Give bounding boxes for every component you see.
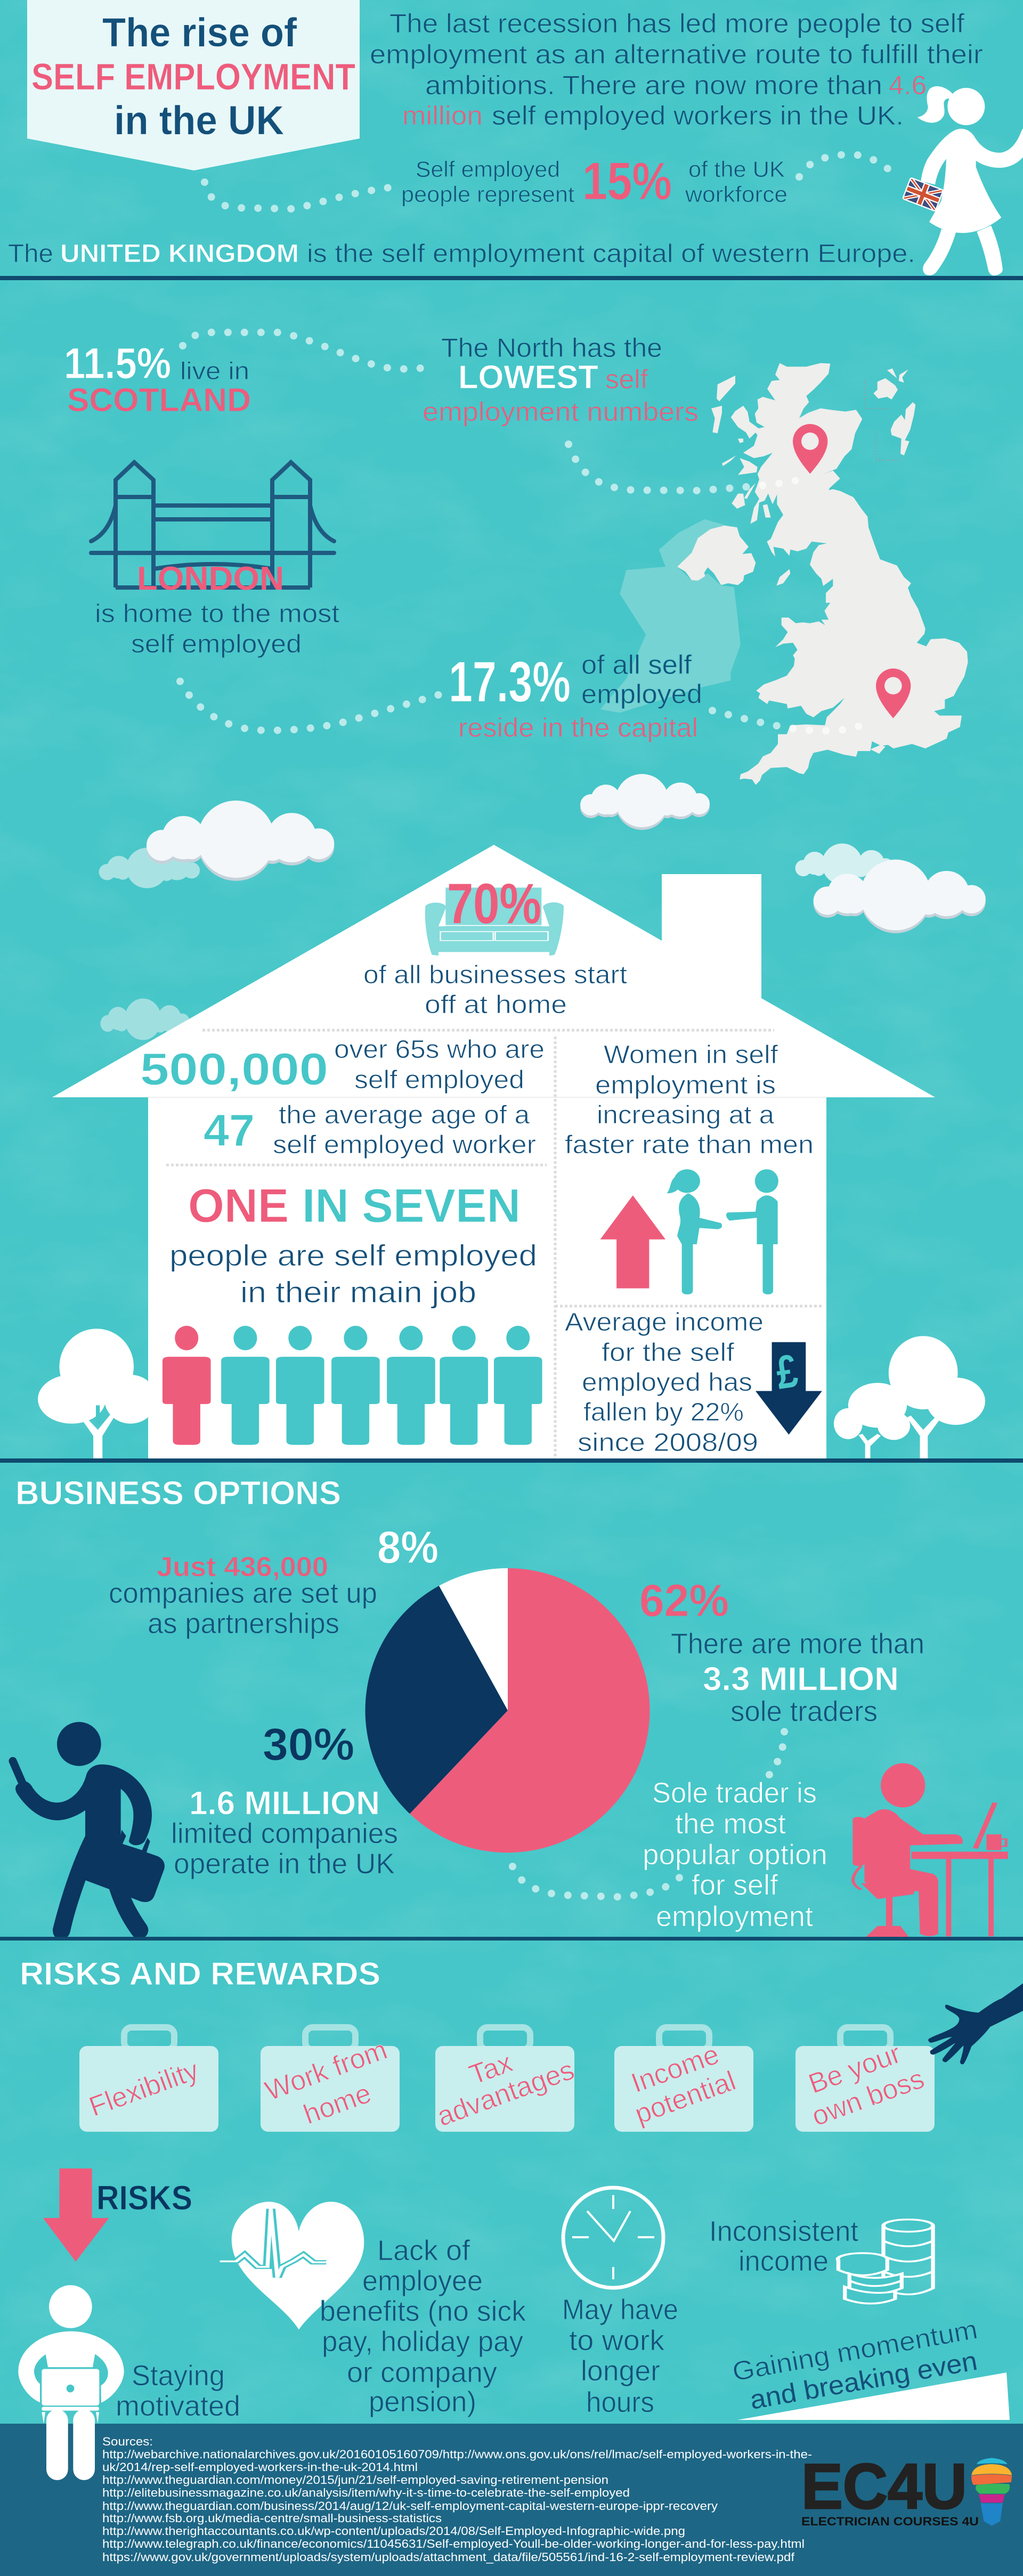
income stat bbox=[565, 1308, 764, 1457]
title banner: The rise of bbox=[102, 10, 297, 55]
sources list: http://www.telegraph.co.uk/finance/economics/11045631/Self-employed-Youll-be-older-working-longer-and-for-less-pay.html bbox=[102, 2537, 805, 2550]
reward bag: income potential bbox=[614, 2027, 753, 2132]
reward bag: work from home: Work from bbox=[261, 2034, 391, 2107]
reward bag: tax advantages: Tax bbox=[465, 2047, 516, 2091]
women stat: faster rate than men bbox=[565, 1131, 814, 1159]
sole traders stat: 62% bbox=[639, 1576, 729, 1626]
North stat bbox=[423, 333, 699, 427]
dotted trail left bbox=[205, 182, 389, 209]
sole traders stat: There are more than bbox=[671, 1628, 924, 1660]
map of UK bbox=[677, 363, 968, 785]
average age stat: 47 bbox=[204, 1105, 255, 1155]
reward bag: work from home: home bbox=[299, 2078, 375, 2131]
income stat: employed has bbox=[582, 1368, 752, 1397]
sole trader popular text: Sole trader is bbox=[652, 1777, 817, 1809]
women stat: increasing at a bbox=[597, 1101, 774, 1129]
income stat: Average income bbox=[565, 1308, 764, 1336]
icon: logo bulb bbox=[971, 2458, 1012, 2526]
London stat: self employed bbox=[131, 630, 302, 658]
70 percent stat: off at home bbox=[425, 991, 567, 1019]
limited companies stat: operate in the UK bbox=[174, 1848, 395, 1880]
icon: person with laptop bbox=[18, 2285, 124, 2480]
Scotland stat bbox=[64, 339, 251, 419]
longer hours text bbox=[562, 2294, 678, 2418]
icon: seven people bbox=[163, 1326, 542, 1445]
icon: risks down arrow bbox=[43, 2169, 109, 2262]
one in seven stat: in their main job bbox=[240, 1275, 476, 1309]
sources list bbox=[102, 2435, 812, 2564]
woman with union flag bbox=[902, 86, 1023, 275]
icon: down arrow with pound bbox=[756, 1342, 822, 1434]
cloud centre bbox=[580, 774, 710, 827]
benefits text: employee bbox=[362, 2265, 483, 2297]
reward bag: income potential: potential bbox=[631, 2065, 740, 2130]
partnerships stat bbox=[109, 1522, 439, 1640]
intro paragraph: employment as an alternative route to fulfill their bbox=[370, 39, 983, 69]
cloud pale left bbox=[99, 848, 200, 888]
dotted trail right bbox=[799, 154, 897, 178]
cloud pale right bbox=[795, 844, 894, 885]
title banner bbox=[27, 0, 360, 170]
average age stat: self employed worker bbox=[273, 1131, 536, 1159]
limited companies stat: 30% bbox=[263, 1719, 354, 1770]
icon: woman and man shaking hands bbox=[667, 1169, 778, 1294]
15 percent stat: of the UK bbox=[688, 157, 785, 182]
icon: person at desk bbox=[852, 1763, 1008, 1937]
longer hours text: longer bbox=[581, 2355, 660, 2387]
women stat: Women in self bbox=[604, 1041, 778, 1069]
sole trader popular text: employment bbox=[656, 1901, 813, 1933]
70 percent stat: 70% bbox=[447, 871, 541, 935]
benefits text: pension) bbox=[369, 2386, 476, 2418]
500,000 stat: 500,000 bbox=[140, 1044, 328, 1094]
Scotland stat: 11.5% bbox=[64, 339, 171, 388]
intro paragraph: self employed workers in the UK. bbox=[492, 101, 904, 131]
inconsistent income text: Inconsistent bbox=[709, 2215, 858, 2247]
intro paragraph: ambitions. There are now more than bbox=[425, 70, 882, 100]
average age stat: the average age of a bbox=[279, 1101, 530, 1129]
benefits text: Lack of bbox=[377, 2235, 470, 2267]
reward bag: be your own boss: Be your bbox=[805, 2038, 905, 2100]
benefits text bbox=[320, 2235, 526, 2418]
icon: sofa bbox=[425, 887, 564, 956]
heading: business options: BUSINESS OPTIONS bbox=[15, 1475, 341, 1512]
capital stat: 17.3% bbox=[449, 649, 571, 714]
panel: house bbox=[52, 845, 935, 1458]
benefits text: pay, holiday pay bbox=[322, 2326, 523, 2358]
longer hours text: May have bbox=[562, 2294, 678, 2326]
staying motivated text bbox=[116, 2360, 240, 2422]
15 percent stat: people represent bbox=[401, 182, 574, 207]
heading: risks and rewards: RISKS AND REWARDS bbox=[20, 1956, 380, 1992]
dotted trail from pie bbox=[513, 1866, 679, 1897]
London stat: is home to the most bbox=[95, 600, 339, 628]
income stat: since 2008/09 bbox=[578, 1429, 758, 1457]
reward bag: be your own boss bbox=[795, 2027, 935, 2132]
Scotland stat: SCOTLAND bbox=[67, 382, 251, 419]
15 percent stat: Self employed bbox=[416, 157, 560, 182]
partnerships stat: Just 436,000 bbox=[157, 1552, 328, 1583]
capital of Europe statement: is the self employment capital of western Europe. bbox=[307, 240, 915, 268]
intro paragraph: million bbox=[402, 101, 483, 131]
benefits text: benefits (no sick bbox=[320, 2295, 526, 2327]
capital of Europe statement: UNITED KINGDOM bbox=[60, 240, 299, 268]
logo: EC4U: ELECTRICIAN COURSES 4U bbox=[801, 2515, 979, 2528]
reward bag: be your own boss: own boss bbox=[808, 2063, 928, 2132]
London stat bbox=[95, 560, 339, 658]
North stat: The North has the bbox=[441, 333, 662, 363]
reward bag: work from home bbox=[261, 2027, 400, 2132]
15 percent stat: workforce bbox=[685, 182, 787, 207]
one in seven stat bbox=[169, 1179, 537, 1309]
sole traders stat: 3.3 MILLION bbox=[703, 1661, 899, 1698]
500,000 stat: over 65s who are bbox=[334, 1036, 545, 1064]
income stat: for the self bbox=[602, 1339, 735, 1367]
icon: coins bbox=[838, 2220, 933, 2304]
title banner: SELF EMPLOYMENT bbox=[31, 56, 355, 97]
sole trader popular text: for self bbox=[692, 1869, 778, 1901]
map of Ireland bbox=[600, 519, 741, 713]
intro paragraph: 4.6 bbox=[889, 70, 927, 100]
North stat: self bbox=[605, 364, 648, 394]
staying motivated text: motivated bbox=[116, 2390, 240, 2422]
capital of Europe statement bbox=[8, 240, 915, 268]
average age stat bbox=[204, 1101, 536, 1159]
partnerships stat: companies are set up bbox=[109, 1577, 377, 1609]
sole traders stat bbox=[639, 1576, 924, 1727]
500,000 stat: self employed bbox=[354, 1066, 524, 1094]
title banner: in the UK bbox=[114, 98, 284, 143]
icon: heart with heartbeat bbox=[220, 2202, 364, 2329]
one in seven stat: IN SEVEN bbox=[302, 1179, 521, 1232]
one in seven stat: people are self employed bbox=[169, 1238, 537, 1272]
reward bag: flexibility bbox=[79, 2027, 218, 2132]
15 percent stat: 15% bbox=[582, 151, 672, 210]
limited companies stat: limited companies bbox=[171, 1817, 398, 1849]
dotted trail sole traders bbox=[768, 1732, 784, 1776]
women stat bbox=[565, 1041, 814, 1159]
women stat: employment is bbox=[595, 1071, 776, 1099]
partnerships stat: 8% bbox=[377, 1522, 439, 1573]
Scotland stat: live in bbox=[180, 357, 249, 385]
one in seven stat: ONE bbox=[188, 1179, 289, 1232]
dotted trail to London bbox=[712, 711, 871, 731]
capital stat: employed bbox=[581, 679, 702, 709]
reward bag: income potential: Income bbox=[627, 2039, 723, 2099]
capital of Europe statement: The bbox=[8, 240, 53, 268]
sources list: https://www.gov.uk/government/uploads/system/uploads/attachment_data/file/505561/ind-16-2-self-employment-review.pdf bbox=[102, 2550, 795, 2564]
limited companies stat bbox=[171, 1719, 398, 1880]
logo: EC4U: EC4U bbox=[801, 2451, 967, 2522]
benefits text: or company bbox=[347, 2357, 497, 2388]
sources list: http://webarchive.nationalarchives.gov.uk/20160105160709/http://www.ons.gov.uk/ons/rel/lmac/self-employed-workers-in-the- bbox=[102, 2448, 812, 2461]
70 percent stat: of all businesses start bbox=[363, 961, 627, 989]
panel: footer bbox=[0, 2424, 1023, 2576]
sole trader popular text: the most bbox=[675, 1808, 786, 1840]
500,000 stat bbox=[140, 1036, 545, 1094]
limited companies stat: 1.6 MILLION bbox=[189, 1785, 380, 1822]
capital stat bbox=[449, 649, 702, 743]
inconsistent income text bbox=[709, 2215, 858, 2277]
North stat: employment numbers bbox=[423, 397, 699, 427]
staying motivated text: Staying bbox=[132, 2360, 225, 2392]
15 percent stat bbox=[401, 151, 787, 210]
icon: momentum wedge bbox=[737, 2373, 1010, 2420]
sources list: Sources: bbox=[102, 2435, 153, 2448]
intro paragraph: The last recession has led more people to self bbox=[389, 9, 964, 38]
icon: up arrow bbox=[600, 1195, 665, 1289]
cloud large right bbox=[814, 860, 986, 931]
dotted trail upper left bbox=[183, 332, 434, 369]
momentum text: Gaining momentum bbox=[730, 2314, 980, 2387]
icon: walking businessman bbox=[13, 1722, 165, 1939]
icon: map pins bbox=[793, 424, 911, 718]
icon: clock bbox=[563, 2188, 663, 2288]
heading: risks: RISKS bbox=[96, 2179, 192, 2217]
sources list: uk/2014/rep-self-employed-workers-in-the-uk-2014.html bbox=[102, 2460, 418, 2474]
London stat: LONDON bbox=[137, 560, 284, 597]
reward bag: flexibility: Flexibility bbox=[85, 2055, 203, 2123]
icon: reaching hand bbox=[928, 1983, 1023, 2064]
reward bag: tax advantages: advantages bbox=[433, 2055, 578, 2132]
sources list: http://www.fsb.org.uk/media-centre/small-business-statistics bbox=[102, 2512, 442, 2525]
pie chart bbox=[365, 1568, 649, 1853]
left tree bbox=[38, 1328, 157, 1458]
cloud large left bbox=[147, 801, 334, 878]
capital stat: of all self bbox=[581, 650, 692, 680]
longer hours text: hours bbox=[586, 2386, 654, 2418]
sources list: http://www.theguardian.com/business/2014/aug/12/uk-self-employment-capital-western-europe-ippr-recovery bbox=[102, 2499, 718, 2513]
sources list: http://www.therightaccountants.co.uk/wp-content/uploads/2014/08/Self-Employed-Infographic-wide.png bbox=[102, 2524, 685, 2538]
cloud pale lower left bbox=[100, 999, 190, 1040]
70 percent stat bbox=[363, 871, 627, 1019]
momentum text: and breaking even bbox=[748, 2346, 979, 2415]
inconsistent income text: income bbox=[738, 2245, 829, 2277]
longer hours text: to work bbox=[569, 2325, 665, 2357]
North stat: LOWEST bbox=[458, 359, 598, 396]
sole trader popular text: popular option bbox=[643, 1839, 827, 1871]
icon: tower bridge bbox=[91, 462, 334, 588]
sole trader popular text bbox=[643, 1777, 827, 1933]
income stat: fallen by 22% bbox=[583, 1398, 744, 1426]
dotted trail lower left bbox=[180, 681, 441, 730]
sources list: http://elitebusinessmagazine.co.uk/analysis/item/why-it-s-time-to-celebrate-the-self-employed bbox=[102, 2486, 630, 2499]
dotted trail to Scotland bbox=[569, 444, 808, 491]
partnerships stat: as partnerships bbox=[148, 1608, 339, 1640]
intro paragraph bbox=[370, 9, 983, 131]
momentum text bbox=[730, 2314, 980, 2415]
capital stat: reside in the capital bbox=[458, 713, 698, 743]
sole traders stat: sole traders bbox=[730, 1695, 878, 1727]
right trees bbox=[834, 1336, 985, 1458]
icon: down arrow with pound: £ bbox=[773, 1344, 801, 1399]
sources list: http://www.theguardian.com/money/2015/jun/21/self-employed-saving-retirement-pension bbox=[102, 2473, 608, 2487]
